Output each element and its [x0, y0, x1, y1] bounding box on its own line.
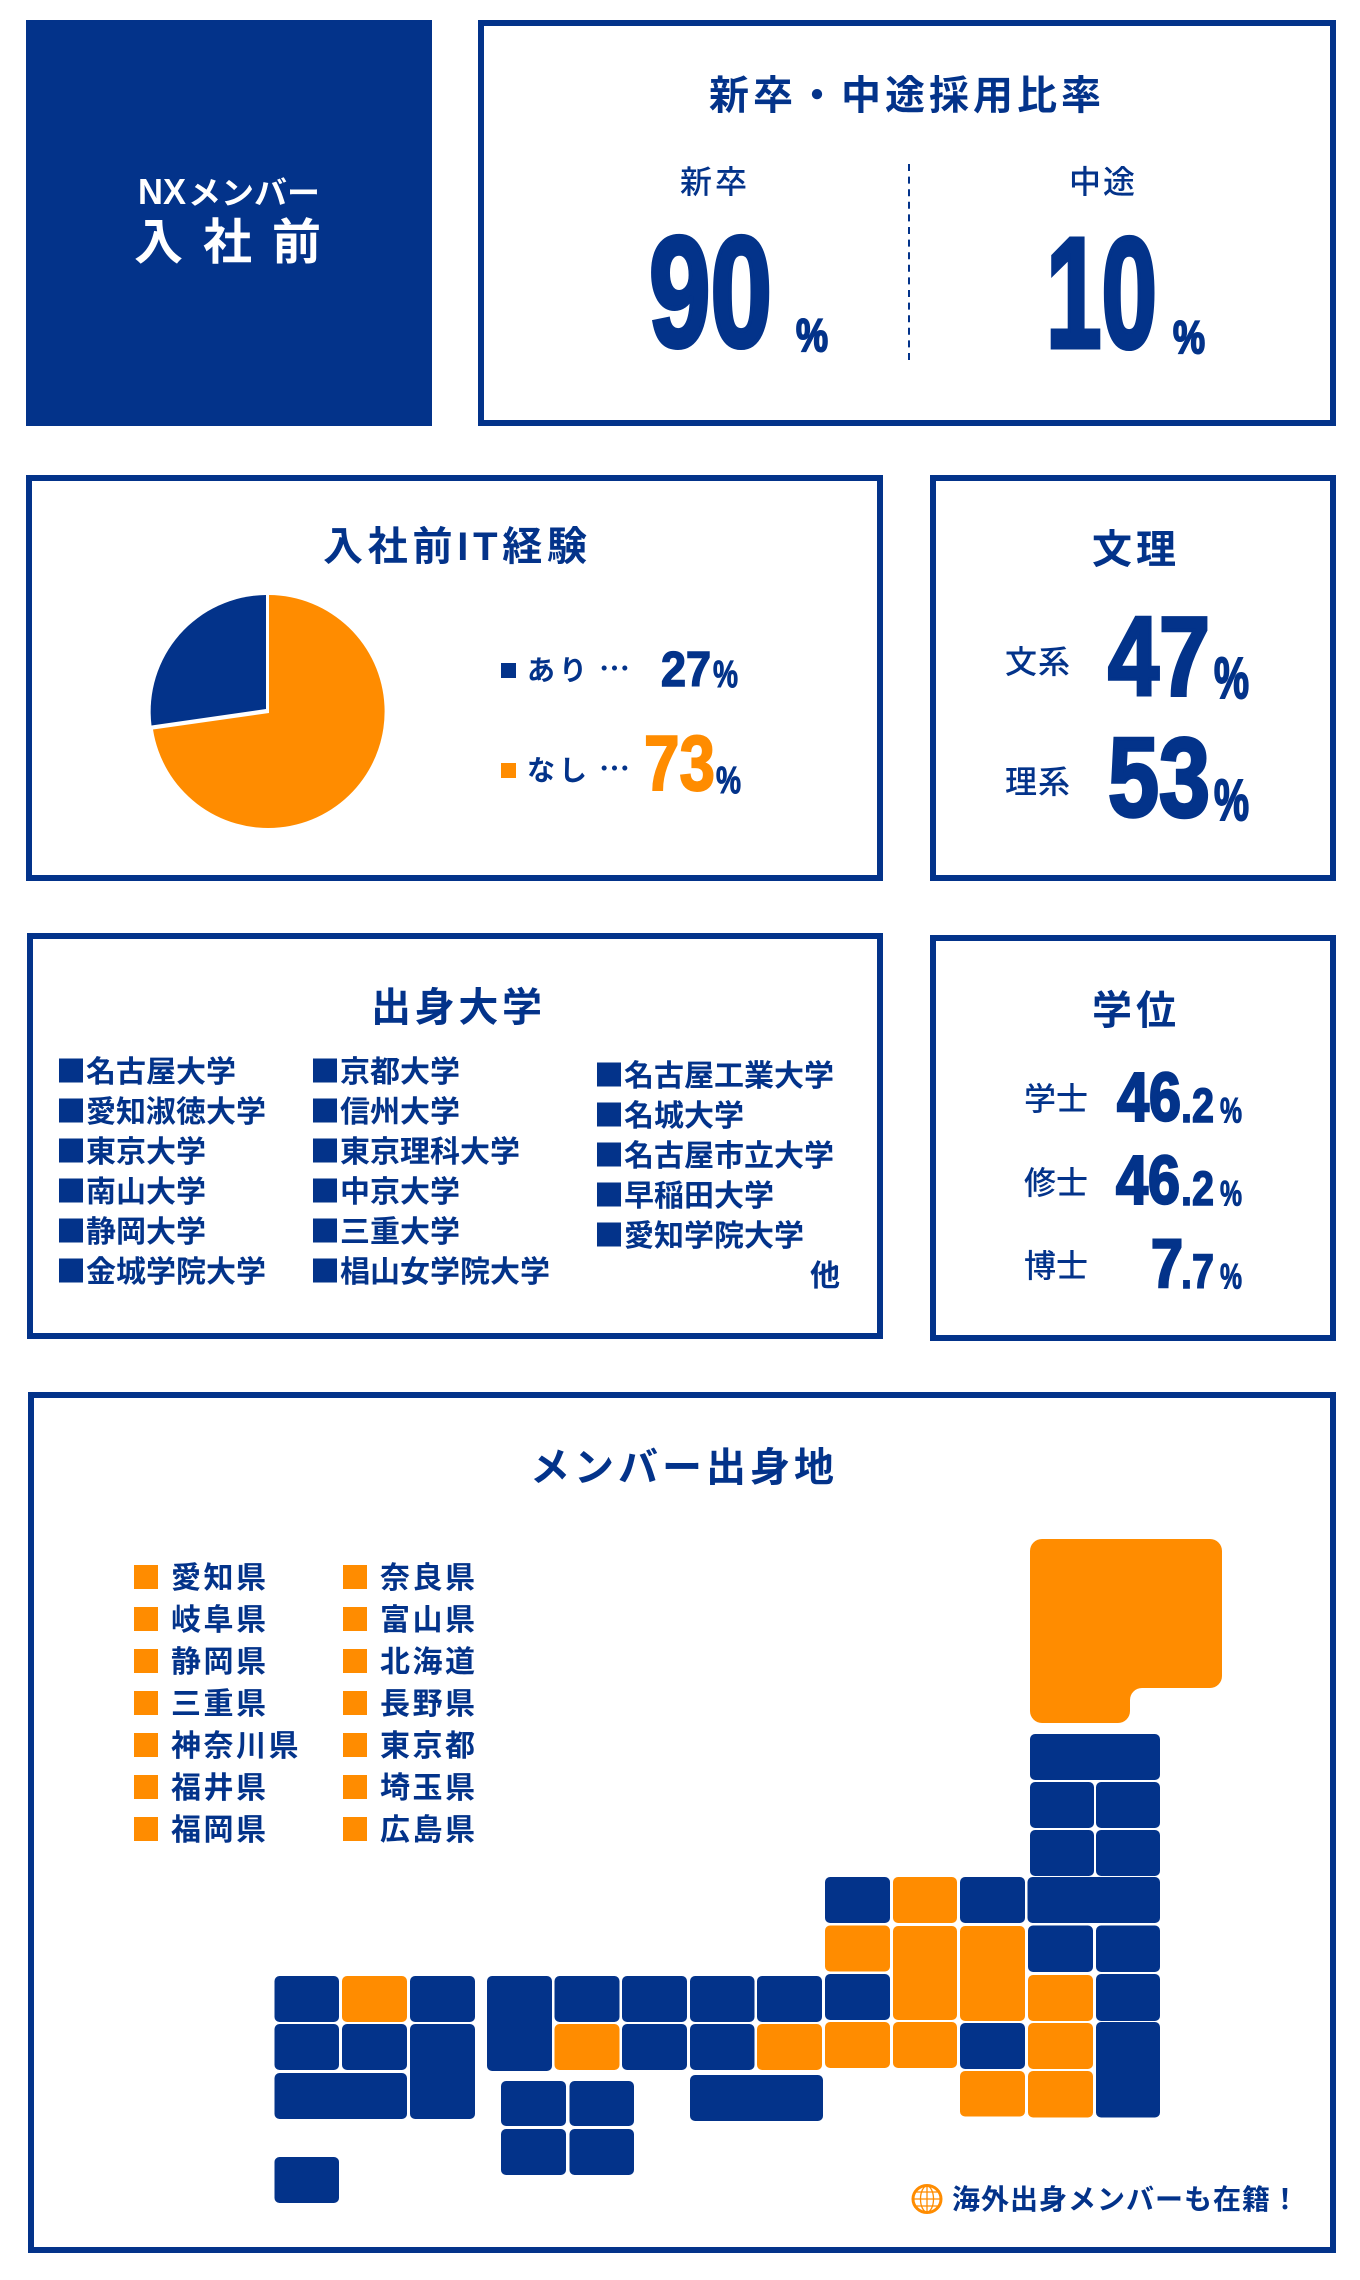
prefecture legend column 2: 北海道 [380, 1646, 478, 1679]
university list column 1 [56, 1047, 266, 1291]
panel: IT experience before joining: % [716, 760, 741, 802]
panel: academic degree: % [1220, 1258, 1242, 1296]
panel: alma mater universities [30, 936, 880, 1336]
university list column 1: ■静岡大学 [56, 1207, 206, 1251]
university list column 2: ■中京大学 [310, 1167, 460, 1211]
prefecture legend column 1: 三重県 [171, 1688, 268, 1721]
university list column 1: ■金城学院大学 [56, 1247, 266, 1291]
university list column 3: 他 [810, 1260, 840, 1293]
panel: academic degree: .2 [1181, 1163, 1214, 1216]
university list column 3: ■名城大学 [594, 1091, 744, 1135]
prefecture legend column 2: 埼玉県 [380, 1772, 478, 1805]
panel: NX member heading: 入社前 [134, 216, 321, 270]
university list column 2: ■京都大学 [310, 1047, 460, 1091]
panel: academic degree: .2 [1181, 1080, 1214, 1133]
panel: IT experience before joining: 73 [644, 719, 715, 807]
panel: humanities and sciences [933, 478, 1333, 878]
panel: humanities and sciences: % [1214, 646, 1249, 711]
university list column 3 [594, 1051, 840, 1293]
panel: member hometowns [31, 1395, 1333, 2250]
university list column 2: ■信州大学 [310, 1087, 460, 1131]
panel: alma mater universities: 出身大学 [371, 986, 542, 1030]
university list column 1: ■南山大学 [56, 1167, 206, 1211]
prefecture legend column 1: 愛知県 [171, 1562, 268, 1595]
prefecture legend column 1 [134, 1562, 301, 1847]
panel: new graduate and mid-career ratio: 新卒・中途採用比率 [709, 74, 1101, 118]
icon: globe [913, 2186, 941, 2212]
university list column 1: ■愛知淑徳大学 [56, 1087, 266, 1131]
university list column 3: ■早稲田大学 [594, 1171, 774, 1215]
university list column 3: ■名古屋工業大学 [594, 1051, 834, 1095]
prefecture legend column 1: 岐阜県 [171, 1604, 268, 1637]
panel: new graduate and mid-career ratio: % [1173, 311, 1205, 363]
panel: academic degree: 46 [1116, 1142, 1180, 1218]
prefecture legend column 2 [343, 1562, 478, 1847]
panel: IT experience before joining: % [713, 654, 738, 696]
panel: academic degree: 7 [1151, 1225, 1183, 1302]
prefecture legend column 1: 神奈川県 [171, 1730, 301, 1763]
university list column 1: ■東京大学 [56, 1127, 206, 1171]
panel: NX member heading: NX [138, 171, 186, 212]
university list column 1: ■名古屋大学 [56, 1047, 236, 1091]
university list column 3: ■名古屋市立大学 [594, 1131, 834, 1175]
panel: new graduate and mid-career ratio: 90 [649, 205, 772, 380]
panel: academic degree: 修士 [1024, 1165, 1088, 1201]
panel: humanities and sciences: 47 [1108, 594, 1210, 719]
panel: academic degree [933, 938, 1333, 1338]
panel: academic degree: 学士 [1024, 1081, 1088, 1117]
prefecture legend column 1: 静岡県 [171, 1646, 268, 1679]
panel: academic degree: .7 [1181, 1246, 1214, 1299]
panel: member hometowns: メンバー出身地 [530, 1446, 834, 1490]
panel: IT experience before joining: … [599, 644, 630, 689]
prefecture legend column 1: 福岡県 [171, 1814, 268, 1847]
panel: NX member heading: メンバー [188, 175, 320, 211]
panel: academic degree: 博士 [1024, 1248, 1088, 1284]
panel: NX member heading [26, 20, 432, 426]
panel: IT experience before joining: … [599, 744, 630, 789]
panel: humanities and sciences: % [1214, 768, 1249, 833]
panel: academic degree: % [1220, 1092, 1242, 1130]
panel: new graduate and mid-career ratio: 10 [1046, 206, 1157, 381]
university list column 3: ■愛知学院大学 [594, 1211, 804, 1255]
university list column 2 [310, 1047, 550, 1291]
university list column 2: ■東京理科大学 [310, 1127, 520, 1171]
prefecture legend column 2: 奈良県 [380, 1562, 478, 1595]
panel: academic degree: 学位 [1092, 989, 1176, 1033]
panel: new graduate and mid-career ratio: 中途 [1069, 164, 1135, 200]
university list column 2: ■椙山女学院大学 [310, 1247, 550, 1291]
tile map of Japan [274, 1539, 1222, 2203]
prefecture legend column 2: 長野県 [380, 1688, 478, 1721]
panel: humanities and sciences: 文理 [1092, 528, 1176, 572]
pie chart [151, 595, 385, 828]
prefecture legend column 2: 富山県 [380, 1604, 478, 1637]
panel: IT experience before joining: あり [527, 655, 587, 686]
panel: IT experience before joining: 27 [661, 643, 711, 697]
overseas members note: 海外出身メンバーも在籍！ [952, 2184, 1300, 2215]
panel: new graduate and mid-career ratio: % [796, 309, 828, 361]
panel: academic degree: 46 [1117, 1058, 1181, 1136]
university list column 2: ■三重大学 [310, 1207, 460, 1251]
panel: IT experience before joining: なし [527, 755, 587, 786]
prefecture legend column 1: 福井県 [171, 1772, 268, 1805]
prefecture legend column 2: 東京都 [380, 1730, 478, 1763]
panel: IT experience before joining: 入社前IT経験 [323, 525, 587, 569]
panel: new graduate and mid-career ratio [481, 23, 1333, 423]
panel: humanities and sciences: 文系 [1005, 644, 1070, 680]
prefecture legend column 2: 広島県 [380, 1814, 478, 1847]
panel: humanities and sciences: 53 [1108, 715, 1210, 840]
panel: new graduate and mid-career ratio: 新卒 [680, 164, 747, 200]
panel: IT experience before joining [29, 478, 880, 878]
panel: academic degree: % [1220, 1174, 1242, 1214]
panel: humanities and sciences: 理系 [1005, 764, 1070, 800]
